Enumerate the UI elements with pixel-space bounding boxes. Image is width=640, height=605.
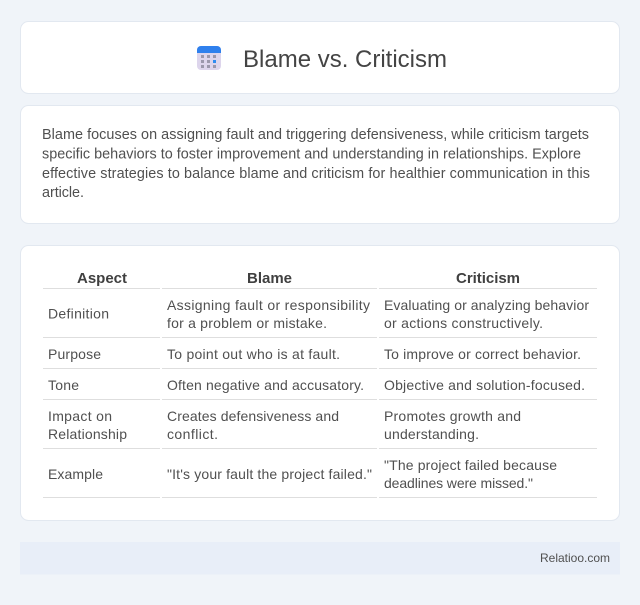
- footer source: Relatioo.com: [540, 551, 610, 565]
- panel: footer: [20, 542, 620, 574]
- row: definition: for a problem or mistake.: [167, 315, 327, 331]
- row: definition: [48, 297, 589, 331]
- row: impact on relationship: Promotes growth and: [384, 408, 521, 424]
- row: example: [48, 457, 557, 491]
- intro paragraph: [42, 127, 590, 201]
- table header: Aspect: [77, 270, 127, 287]
- row: impact on relationship: understanding.: [384, 426, 479, 442]
- title: Blame vs. Criticism: [243, 46, 447, 73]
- row: definition: Evaluating or analyzing behavior: [384, 297, 589, 313]
- row: tone: Often negative and accusatory.: [167, 377, 364, 393]
- row: impact on relationship: Creates defensiveness and: [167, 408, 339, 424]
- row: tone: [48, 377, 585, 393]
- panel: intro text: [20, 106, 620, 224]
- row: definition: Definition: [48, 306, 109, 322]
- table header: [77, 270, 520, 287]
- table header: Criticism: [456, 270, 520, 287]
- row: example: "It's your fault the project failed.": [167, 466, 372, 482]
- table header: Blame: [247, 270, 292, 287]
- row: purpose: To point out who is at fault.: [167, 346, 340, 362]
- row: impact on relationship: [48, 408, 521, 442]
- intro paragraph: article.: [42, 185, 84, 201]
- panel: comparison table: [20, 246, 620, 520]
- row: impact on relationship: Relationship: [48, 426, 127, 442]
- row: example: deadlines were missed.": [384, 475, 533, 491]
- panel: title header: [20, 22, 620, 94]
- row: purpose: [48, 346, 581, 362]
- row: tone: Objective and solution-focused.: [384, 377, 585, 393]
- row: purpose: Purpose: [48, 346, 101, 362]
- row: definition: or actions constructively.: [384, 315, 543, 331]
- intro paragraph: effective strategies to balance blame and criticism for healthier communication in this: [42, 166, 590, 182]
- row: purpose: To improve or correct behavior.: [384, 346, 581, 362]
- row: impact on relationship: conflict.: [167, 426, 218, 442]
- row: example: Example: [48, 466, 103, 482]
- intro paragraph: Blame focuses on assigning fault and triggering defensiveness, while criticism targets: [42, 127, 589, 143]
- intro paragraph: specific behaviors to foster improvement and understanding in relationships. Explore: [42, 146, 581, 162]
- row: definition: Assigning fault or responsibility: [167, 297, 370, 313]
- row: tone: Tone: [48, 377, 79, 393]
- icon: calendar: [197, 46, 221, 70]
- row: example: "The project failed because: [384, 457, 557, 473]
- row: impact on relationship: Impact on: [48, 408, 112, 424]
